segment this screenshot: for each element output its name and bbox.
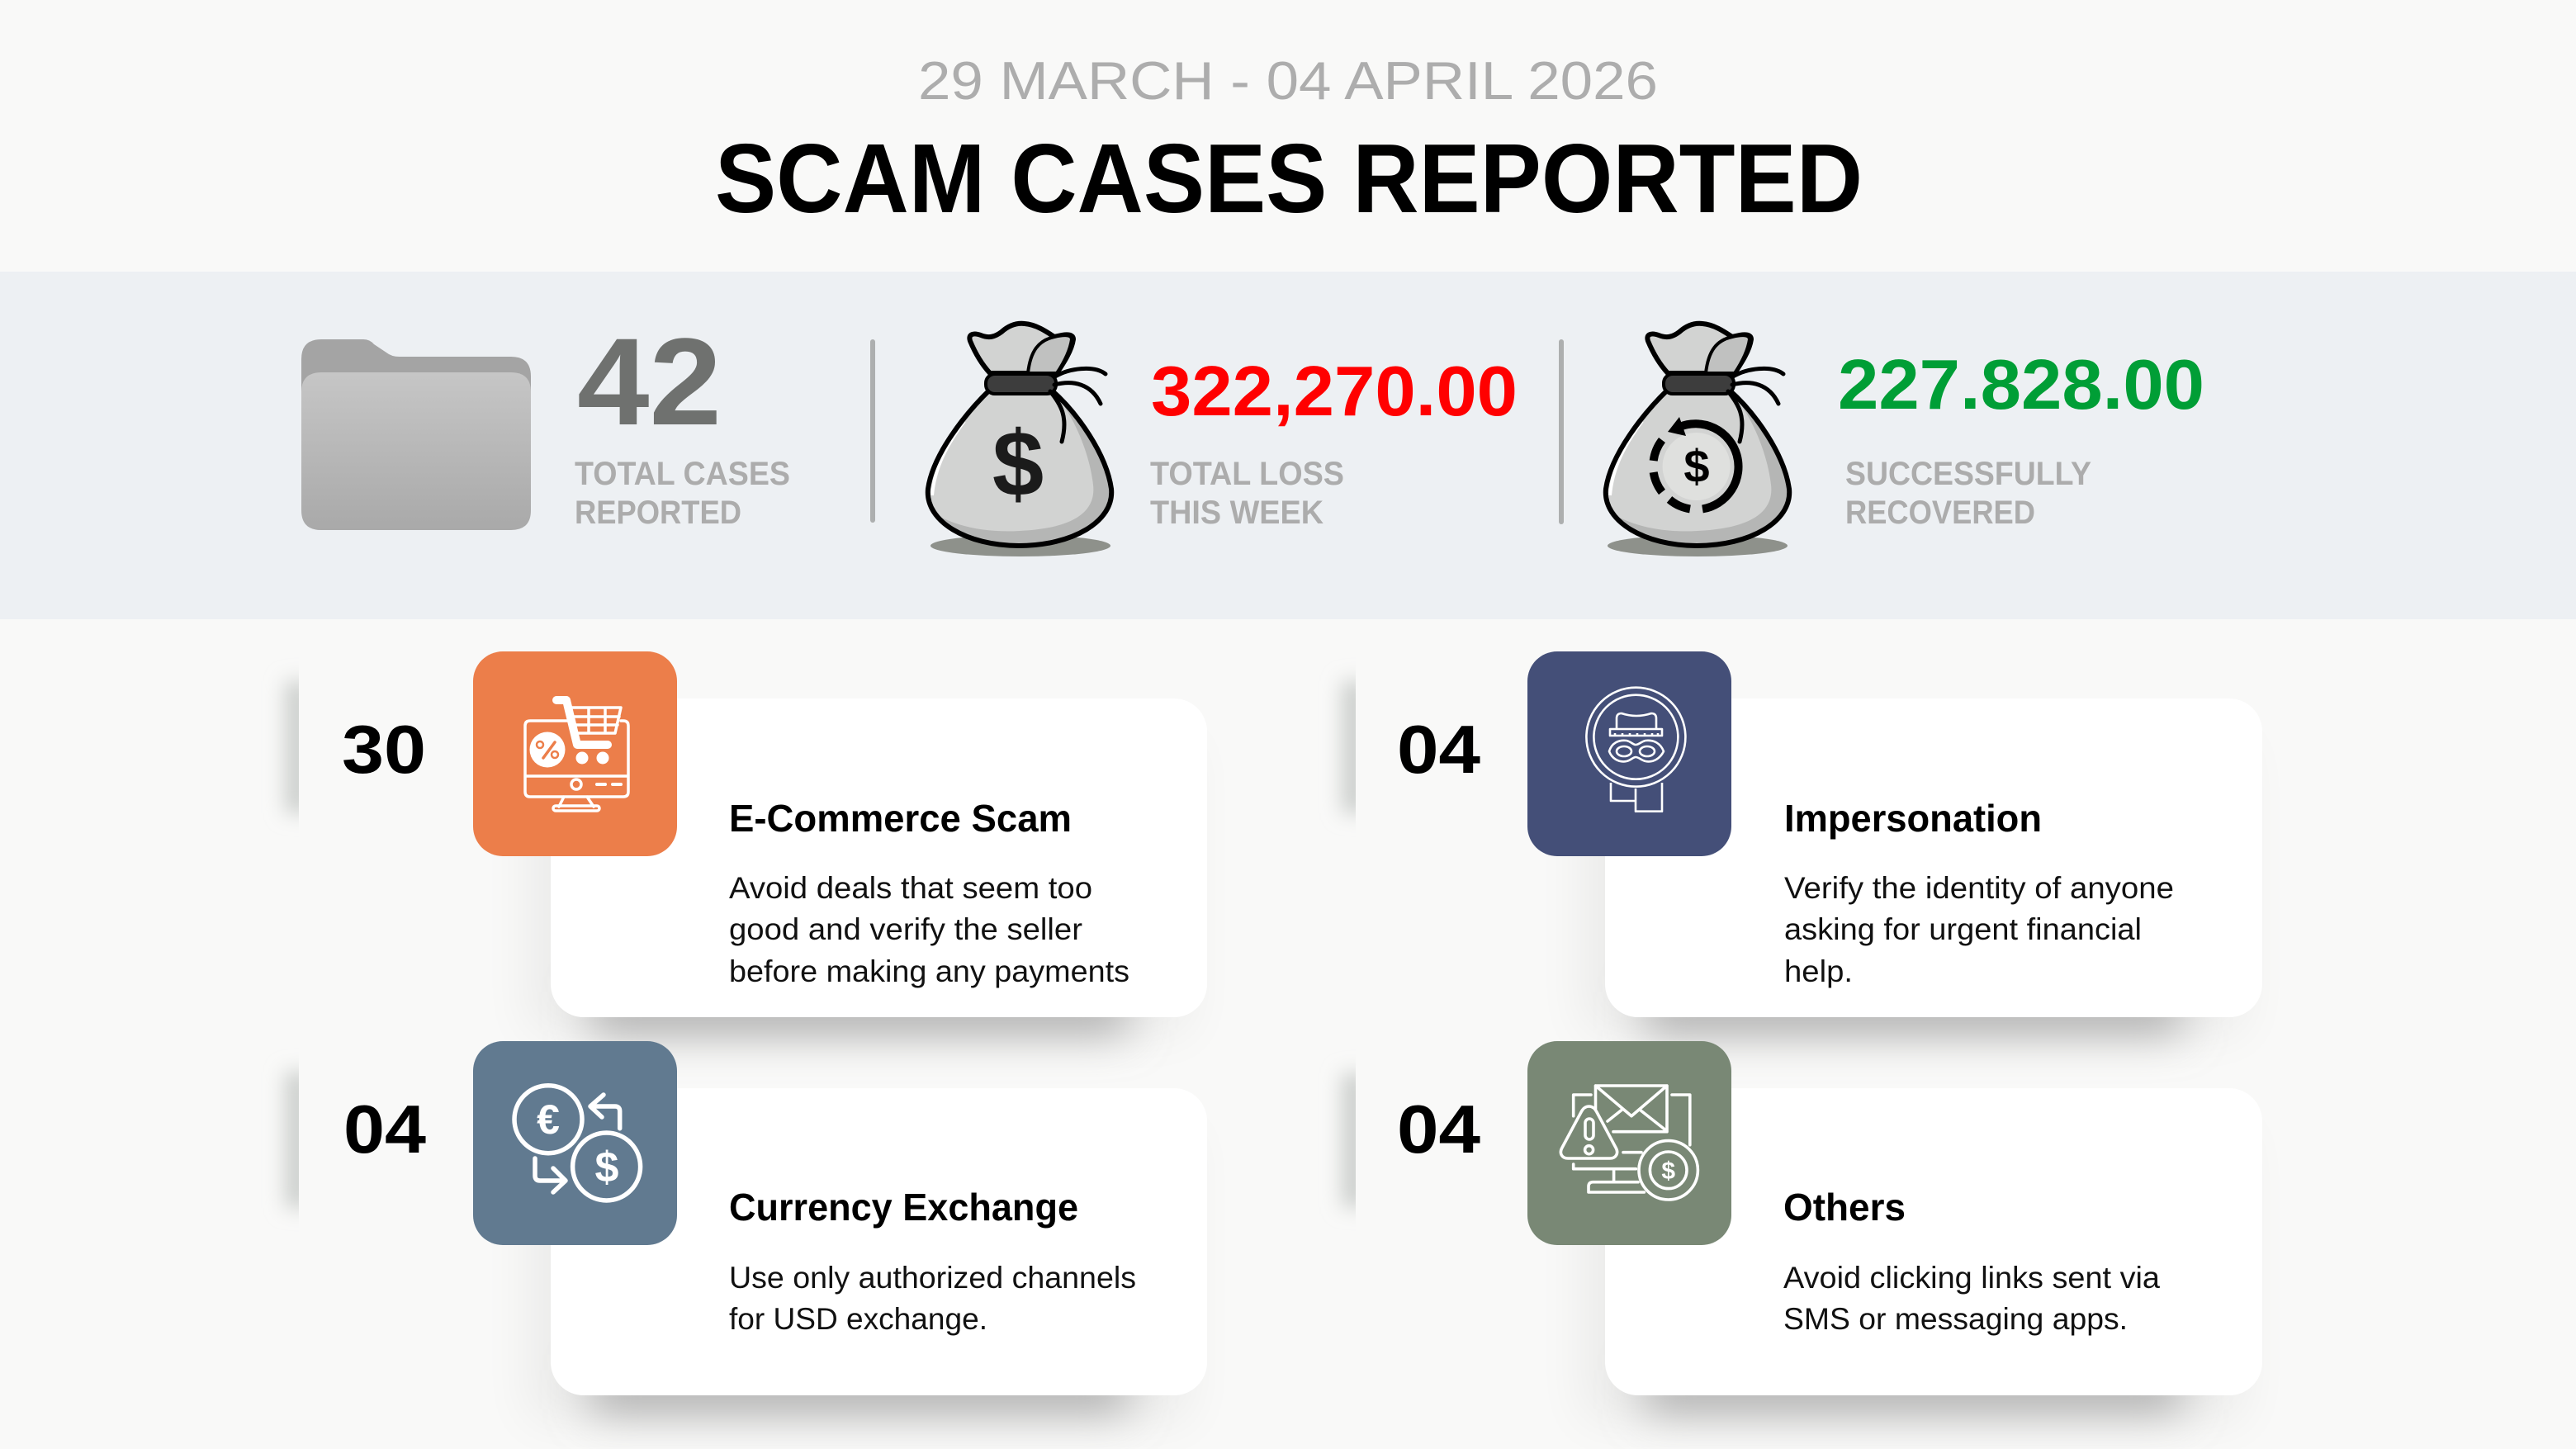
icon: euro and dollar exchange: € (537, 1096, 560, 1143)
panel: currency exchange (285, 1041, 1207, 1420)
stat: total cases: REPORTED (575, 495, 741, 531)
stat: total loss (1150, 353, 1518, 531)
icon: money bag with dollar: $ (992, 412, 1044, 515)
icon: phishing email warning and coin (1527, 1041, 1731, 1245)
icon: money bag with recovery arrow: $ (1683, 440, 1710, 492)
card body: help. (1784, 954, 1853, 988)
panel: others (1342, 1041, 2262, 1420)
count: 04: 04 (1397, 1091, 1480, 1167)
stat: successfully recovered (1838, 346, 2204, 531)
icon: phishing email warning and coin: $ (1661, 1158, 1675, 1185)
icon: shopping cart on monitor (473, 651, 677, 856)
card title: Currency Exchange (729, 1186, 1078, 1229)
card title: Impersonation (1784, 797, 2042, 840)
stat: total loss: TOTAL LOSS (1150, 456, 1344, 492)
stat: total loss: 322,270.00 (1151, 353, 1518, 431)
icon: euro and dollar exchange: $ (595, 1144, 619, 1191)
count: 30: 30 (342, 711, 426, 788)
card title: E-Commerce Scam (729, 797, 1072, 840)
main title: SCAM CASES REPORTED (715, 124, 1863, 234)
card body: Verify the identity of anyone (1784, 871, 2174, 905)
card body: SMS or messaging apps. (1783, 1302, 2128, 1336)
icon: masked spy in badge (1527, 651, 1731, 856)
card body: Use only authorized channels (729, 1261, 1136, 1295)
card body: good and verify the seller (729, 912, 1082, 946)
stat: total cases: 42 (577, 312, 722, 451)
card body: asking for urgent financial (1784, 912, 2142, 946)
date range heading: 29 MARCH - 04 APRIL 2026 (918, 50, 1658, 111)
stat: successfully recovered: SUCCESSFULLY (1845, 456, 2091, 492)
stat: total loss: THIS WEEK (1150, 495, 1324, 531)
stat: successfully recovered: 227.828.00 (1838, 346, 2204, 424)
icon: euro and dollar exchange (473, 1041, 677, 1245)
card body: Avoid clicking links sent via (1783, 1261, 2160, 1295)
panel: e-commerce scam (285, 651, 1207, 1032)
card body: before making any payments (729, 954, 1129, 988)
icon: money bag with dollar (928, 324, 1111, 556)
count: 04: 04 (1397, 711, 1480, 788)
card body: for USD exchange. (729, 1302, 987, 1336)
stat: successfully recovered: RECOVERED (1845, 495, 2035, 531)
card body: Avoid deals that seem too (729, 871, 1092, 905)
icon: folder (301, 339, 531, 530)
count: 04: 04 (343, 1091, 426, 1167)
stat: total cases: TOTAL CASES (575, 456, 790, 492)
panel: impersonation (1342, 651, 2262, 1032)
card title: Others (1783, 1186, 1906, 1229)
panel: summary stats band (0, 272, 2576, 619)
icon: money bag with recovery arrow (1606, 324, 1789, 556)
stat: total cases (575, 312, 790, 531)
